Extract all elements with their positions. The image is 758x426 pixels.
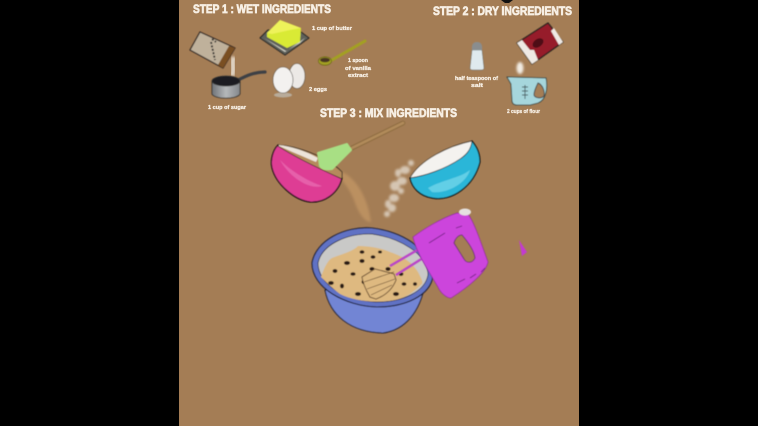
cord nub (459, 208, 471, 216)
label: eggs: 2 eggs (309, 87, 327, 93)
bowl rim (312, 228, 433, 307)
icon: vanilla spoon (318, 41, 365, 65)
icon: butter on plate (260, 20, 309, 55)
icon: eggs (273, 64, 305, 98)
icon: flour bag (517, 23, 563, 64)
chocolate chips (328, 250, 417, 296)
icon: salt shaker (470, 42, 484, 70)
icon: hand mixer (362, 208, 488, 299)
label: salt: salt (471, 83, 483, 89)
label: vanilla: extract (348, 73, 368, 79)
background panel (179, 0, 579, 426)
icon: measuring cup (507, 77, 547, 105)
label: vanilla: 1 spoon (348, 58, 369, 64)
step 3 title: STEP 3 : MIX INGREDIENTS (320, 108, 457, 120)
batter (321, 246, 422, 302)
icon: pink bowl (271, 145, 342, 202)
top edge mark (501, 0, 513, 3)
icon: falling flour (516, 62, 524, 74)
icon: blue bowl (410, 141, 480, 199)
label: flour: 2 cups of flour (507, 109, 541, 115)
icon: spatula (318, 123, 403, 169)
label: salt (455, 76, 498, 89)
label: vanilla (345, 58, 372, 79)
mixer body (413, 213, 488, 298)
label: sugar: 1 cup of sugar (208, 105, 247, 111)
bowl body (325, 284, 425, 333)
icon: sugar box (190, 32, 235, 68)
step 1 title: STEP 1 : WET INGREDIENTS (193, 4, 331, 16)
body marks (429, 226, 485, 283)
icon: flour pour (384, 160, 414, 217)
step 2 title: STEP 2 : DRY INGREDIENTS (433, 6, 572, 18)
bowl interior (318, 234, 428, 302)
label: vanilla: of vanilla (345, 66, 372, 72)
icon: falling sugar (232, 57, 234, 76)
icon: batter pour (338, 172, 371, 222)
label: butter: 1 cup of butter (312, 26, 353, 32)
beaters (362, 269, 396, 299)
label: salt: half teaspoon of (455, 76, 498, 82)
icon: mixing bowl with batter (312, 228, 433, 333)
icon: magenta splash (519, 240, 527, 256)
icon: saucepan (212, 72, 265, 98)
handle hole (454, 235, 475, 262)
